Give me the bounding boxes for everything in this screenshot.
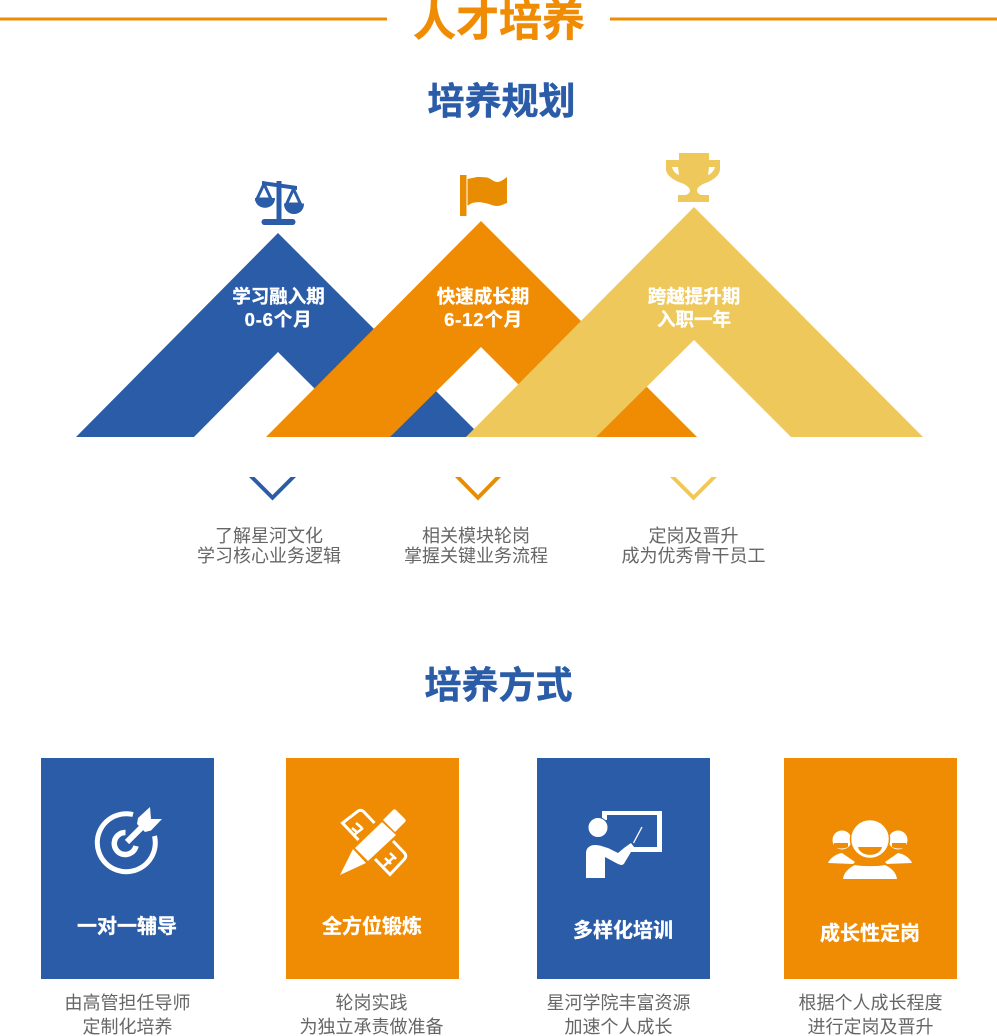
stage 2 chevron: orange — [266, 221, 697, 437]
caption: 全方位锻炼 — [300, 993, 444, 1036]
icon: target with arrow — [97, 807, 162, 872]
icon: scales — [255, 181, 304, 225]
stage 1 label: 学习融入期 — [232, 286, 325, 307]
right person — [885, 830, 912, 864]
stage 3 label: 跨越提升期 — [648, 286, 740, 307]
stage 1 label — [232, 286, 325, 330]
arrow: yellow chevron — [670, 477, 717, 500]
stage 3 chevron: yellow — [466, 207, 923, 437]
caption: stage 2 — [404, 526, 548, 566]
caption: stage 3: 成为优秀骨干员工 — [622, 546, 766, 566]
icon: trophy — [666, 153, 720, 202]
caption: 全方位锻炼: 轮岗实践 — [336, 993, 408, 1013]
caption: 一对一辅导: 由高管担任导师 — [64, 993, 190, 1013]
stage 2 label: 快速成长期 — [437, 286, 529, 307]
caption: stage 2: 相关模块轮岗 — [422, 526, 530, 546]
caption: 多样化培训 — [546, 993, 690, 1036]
caption: stage 3 — [622, 526, 766, 566]
stage 1 label: 0-6个月 — [245, 309, 312, 330]
heading: 培养方式: 培养方式 — [424, 665, 572, 706]
stage 2 label — [437, 286, 529, 330]
caption: 多样化培训: 星河学院丰富资源 — [546, 993, 690, 1013]
stage 3 label: 入职一年 — [657, 309, 731, 330]
card title: 全方位锻炼 — [322, 914, 422, 938]
caption: stage 1: 了解星河文化 — [215, 526, 323, 546]
panel: 一对一辅导 — [41, 758, 214, 979]
heading: 培养规划: 培养规划 — [428, 81, 576, 122]
card title: 成长性定岗 — [820, 921, 920, 945]
icon: flag — [460, 175, 507, 216]
caption: 一对一辅导 — [64, 993, 190, 1036]
icon: pencil and ruler — [340, 809, 406, 875]
icon: group of people — [828, 820, 912, 879]
card title: 一对一辅导 — [77, 914, 177, 938]
caption: 成长性定岗 — [798, 993, 942, 1036]
panel: 全方位锻炼 — [286, 758, 459, 979]
stage 3 label — [648, 286, 740, 330]
icon: teacher at board — [586, 811, 662, 878]
stage 1 chevron: blue — [76, 233, 482, 437]
caption: stage 3: 定岗及晋升 — [648, 526, 738, 546]
title: 人才培养 — [0, 0, 997, 46]
caption: stage 2: 掌握关键业务流程 — [404, 546, 548, 566]
left person — [828, 830, 855, 864]
center person — [843, 820, 897, 879]
arrow: orange chevron — [455, 477, 501, 500]
stage 2 label: 6-12个月 — [444, 309, 523, 330]
mountain chart: three growth stages — [76, 207, 923, 437]
card title: 多样化培训 — [573, 919, 673, 942]
panel: 多样化培训 — [537, 758, 710, 979]
caption: stage 1: 学习核心业务逻辑 — [197, 546, 341, 566]
panel: 成长性定岗 — [784, 758, 957, 979]
arrow: blue chevron — [249, 477, 296, 500]
caption: 成长性定岗: 根据个人成长程度 — [798, 993, 942, 1013]
caption: stage 1 — [197, 526, 341, 566]
